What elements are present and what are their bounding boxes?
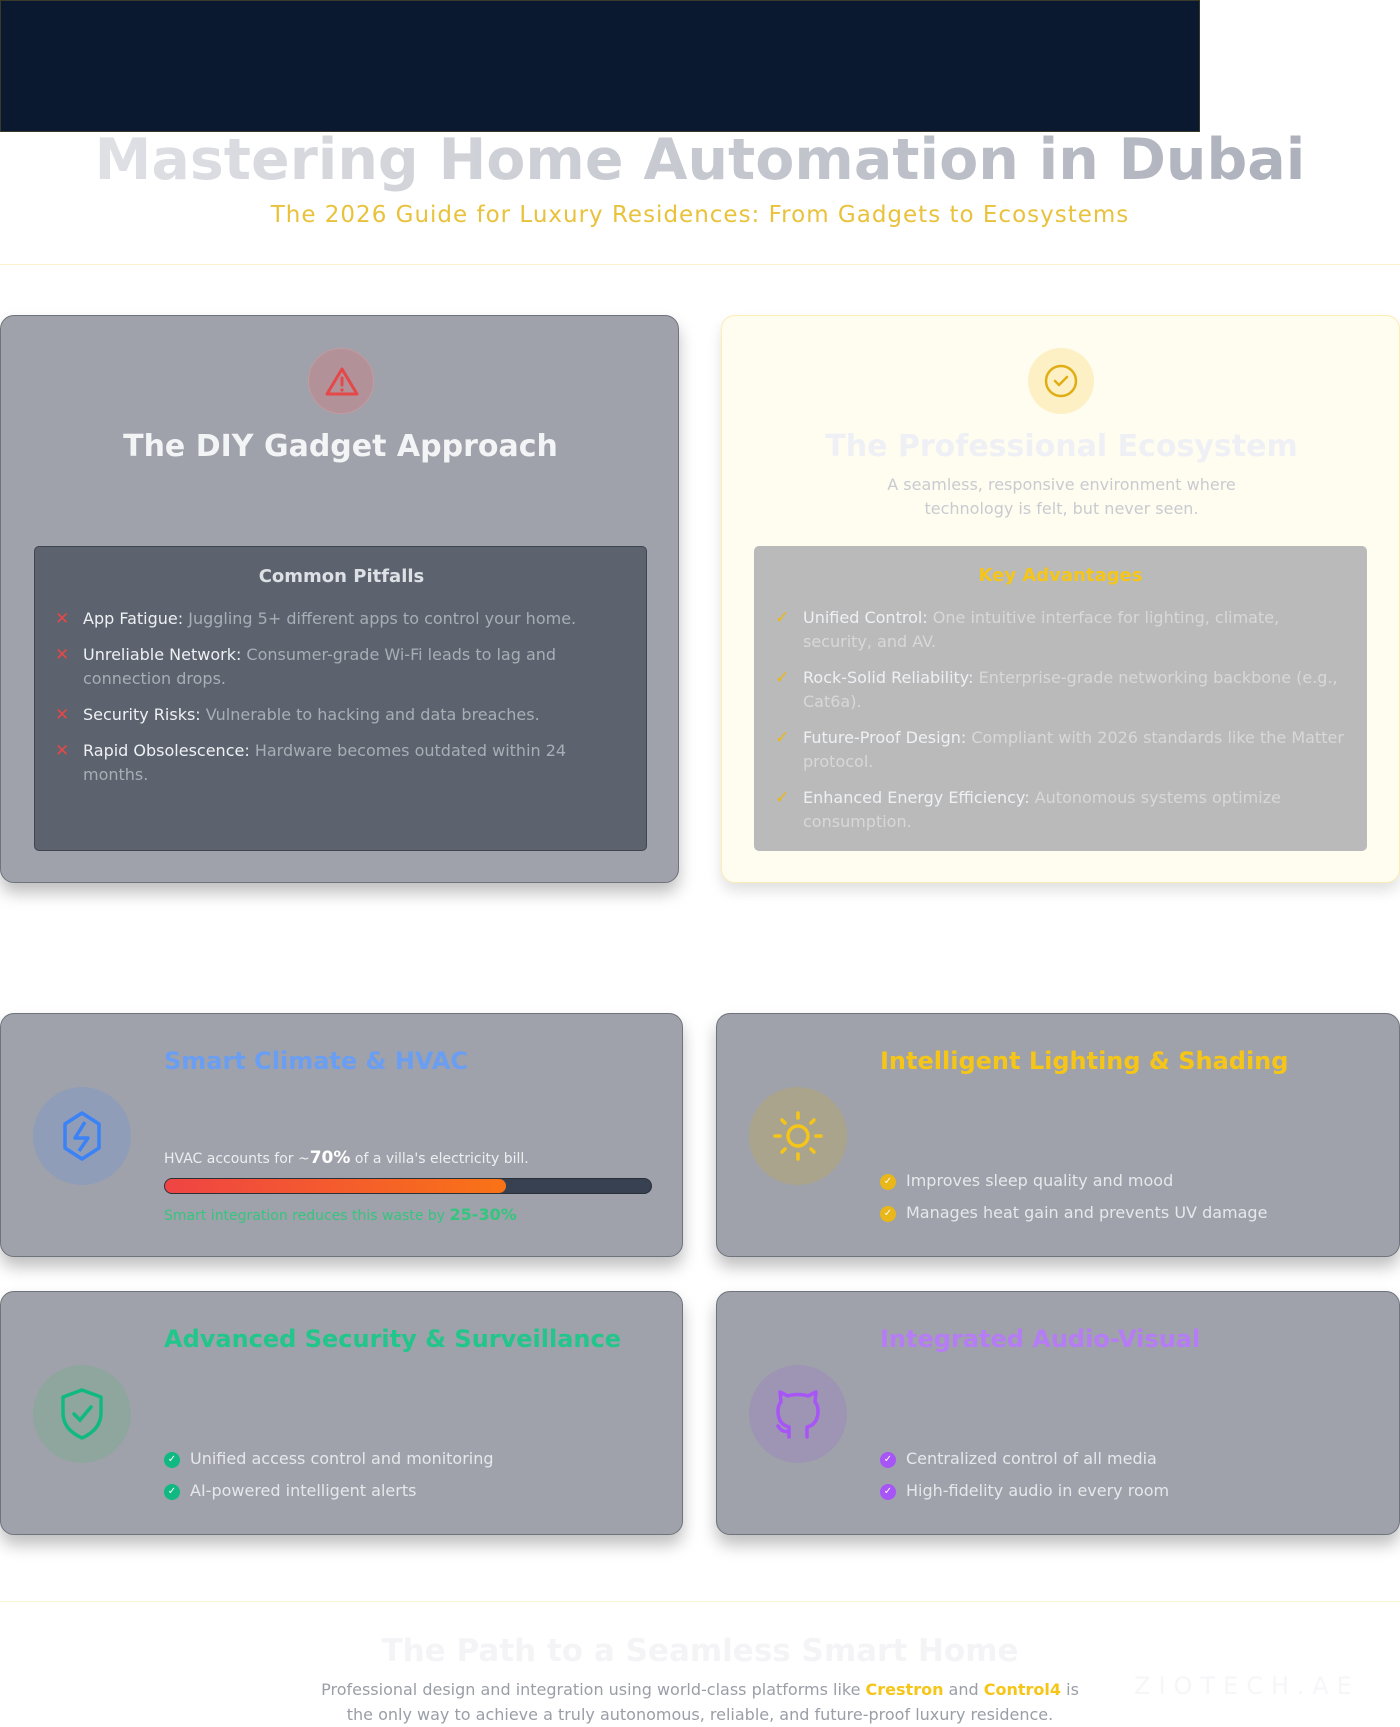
card: audio-visual: High-fidelity audio in every room bbox=[906, 1481, 1169, 1500]
icon: shield bbox=[33, 1365, 131, 1463]
title: Smart Climate & HVAC bbox=[164, 1047, 468, 1075]
subtitle: The 2026 Guide for Luxury Residences: From Gadgets to Ecosystems bbox=[271, 202, 1129, 228]
list: Improves sleep quality and mood bbox=[906, 1171, 1173, 1190]
pitfalls box: Common Pitfalls bbox=[259, 566, 424, 587]
card: audio-visual: ✓ bbox=[884, 1486, 892, 1496]
advantages box: Key Advantages bbox=[979, 565, 1142, 586]
icon: climate bbox=[33, 1087, 131, 1185]
card: security: ✓ bbox=[168, 1486, 176, 1496]
list: ✓ bbox=[884, 1454, 892, 1464]
list: ✓ bbox=[168, 1454, 176, 1464]
pitfalls box: ✕ bbox=[55, 645, 69, 665]
card: lighting bbox=[716, 1013, 1400, 1257]
title: Intelligent Lighting & Shading bbox=[880, 1047, 1288, 1075]
pitfalls box: Security Risks: Vulnerable to hacking and data breaches. bbox=[83, 705, 540, 724]
heading: The DIY Gadget Approach bbox=[123, 429, 558, 464]
card: audio-visual bbox=[716, 1291, 1400, 1535]
advantages box: Rock-Solid Reliability: Enterprise-grade networking backbone (e.g., Cat6a). bbox=[803, 668, 1338, 711]
advantages box: Future-Proof Design: Compliant with 2026 standards like the Matter protocol. bbox=[803, 728, 1344, 771]
card: climate bbox=[0, 1013, 683, 1257]
card: lighting: ✓ bbox=[884, 1208, 892, 1218]
card: security: AI-powered intelligent alerts bbox=[190, 1481, 416, 1500]
advantages box: ✓ bbox=[775, 608, 789, 628]
footer title: The Path to a Seamless Smart Home bbox=[381, 1633, 1019, 1669]
stat: HVAC accounts for ~70% of a villa's electricity bill. bbox=[164, 1148, 529, 1168]
card: lighting: Manages heat gain and prevents UV damage bbox=[906, 1203, 1267, 1222]
pitfalls box: Rapid Obsolescence: Hardware becomes outdated within 24 months. bbox=[83, 741, 566, 784]
savings: Smart integration reduces this waste by 25-30% bbox=[164, 1205, 517, 1224]
description: A seamless, responsive environment where bbox=[887, 475, 1236, 494]
panel: DIY approach bbox=[0, 315, 679, 883]
description bbox=[887, 475, 1236, 518]
header bar bbox=[0, 0, 1200, 132]
heading: The Professional Ecosystem bbox=[825, 429, 1298, 464]
icon: warning bbox=[308, 348, 374, 414]
footer text: Professional design and integration using world-class platforms like Crestron and Control4 is bbox=[321, 1680, 1079, 1699]
pitfalls box bbox=[34, 546, 647, 851]
panel: professional ecosystem bbox=[721, 315, 1400, 883]
advantages box: ✓ bbox=[775, 668, 789, 688]
advantages box: Unified Control: One intuitive interface for lighting, climate, security, and AV. bbox=[803, 608, 1279, 651]
bar chart bbox=[164, 1178, 652, 1194]
advantages box: Enhanced Energy Efficiency: Autonomous systems optimize consumption. bbox=[803, 788, 1281, 831]
pitfalls box: ✕ bbox=[55, 705, 69, 725]
watermark: ZIOTECH.AE bbox=[1134, 1672, 1360, 1700]
icon: sun bbox=[749, 1087, 847, 1185]
footer text bbox=[321, 1680, 1079, 1724]
description: technology is felt, but never seen. bbox=[924, 499, 1199, 518]
advantages box: ✓ bbox=[775, 728, 789, 748]
card: security bbox=[0, 1291, 683, 1535]
list: ✓ bbox=[884, 1176, 892, 1186]
icon: check circle bbox=[1028, 348, 1094, 414]
list: Centralized control of all media bbox=[906, 1449, 1157, 1468]
advantages box bbox=[754, 546, 1367, 851]
footer text: the only way to achieve a truly autonomous, reliable, and future-proof luxury residence. bbox=[347, 1705, 1053, 1724]
pitfalls box: Unreliable Network: Consumer-grade Wi-Fi leads to lag and connection drops. bbox=[83, 645, 556, 688]
advantages box: ✓ bbox=[775, 788, 789, 808]
pitfalls box: ✕ bbox=[55, 741, 69, 761]
pitfalls box: ✕ bbox=[55, 609, 69, 629]
title: Advanced Security & Surveillance bbox=[164, 1325, 621, 1353]
list: Unified access control and monitoring bbox=[190, 1449, 494, 1468]
title: Mastering Home Automation in Dubai bbox=[95, 127, 1305, 193]
title: Integrated Audio-Visual bbox=[880, 1325, 1200, 1353]
pitfalls box: App Fatigue: Juggling 5+ different apps to control your home. bbox=[83, 609, 576, 628]
icon: av bbox=[749, 1365, 847, 1463]
